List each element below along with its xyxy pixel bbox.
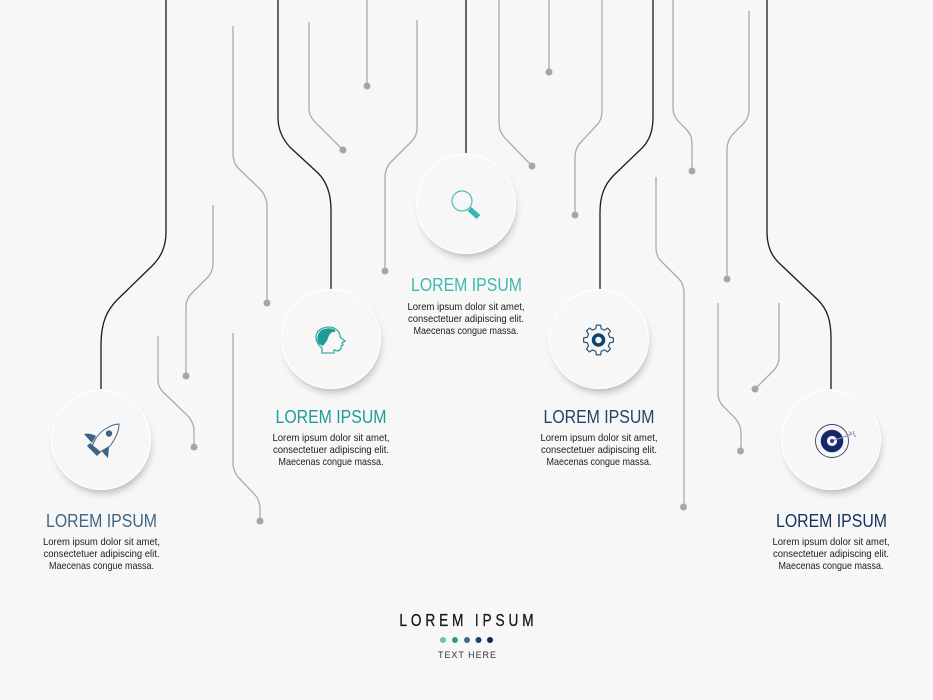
- text 4: consectetuer adipiscing elit.: [541, 444, 657, 456]
- heading 2: LOREM IPSUM: [276, 407, 386, 427]
- text 1: Maecenas congue massa.: [49, 560, 154, 572]
- icon: target: [816, 424, 856, 458]
- text 1: [43, 536, 160, 572]
- circuit lines: black: [101, 0, 831, 389]
- text 2: Lorem ipsum dolor sit amet,: [272, 432, 390, 444]
- text 3: [408, 301, 524, 337]
- footer title: LOREM IPSUM: [399, 612, 534, 630]
- text 5: [772, 536, 890, 572]
- text 4: Lorem ipsum dolor sit amet,: [540, 432, 658, 444]
- icon: gear: [584, 325, 613, 355]
- footer dots: [440, 637, 493, 643]
- circuit lines: grey: [158, 0, 779, 524]
- text 3: Maecenas congue massa.: [414, 325, 518, 337]
- text 1: consectetuer adipiscing elit.: [44, 548, 160, 560]
- panel: step 2 head: [272, 290, 390, 468]
- circle 1: [52, 390, 150, 493]
- icon: magnifier: [452, 191, 478, 217]
- panel: step 3 magnifier: [408, 154, 524, 337]
- footer subtitle: TEXT HERE: [438, 650, 496, 660]
- text 2: Maecenas congue massa.: [278, 456, 384, 468]
- panel: step 1 rocket: [43, 390, 160, 572]
- text 4: [540, 432, 658, 468]
- icon: rocket: [84, 424, 119, 458]
- text 3: consectetuer adipiscing elit.: [408, 313, 524, 325]
- circle 5: [782, 390, 880, 493]
- circle 2: [282, 290, 380, 392]
- circle 3: [416, 154, 516, 257]
- text 3: Lorem ipsum dolor sit amet,: [408, 301, 524, 313]
- circle 4: [550, 290, 648, 392]
- icon: head: [316, 327, 345, 353]
- text 2: [272, 432, 390, 468]
- text 1: Lorem ipsum dolor sit amet,: [43, 536, 160, 548]
- text 5: consectetuer adipiscing elit.: [773, 548, 889, 560]
- heading 3: LOREM IPSUM: [411, 275, 522, 295]
- text 2: consectetuer adipiscing elit.: [273, 444, 389, 456]
- heading 1: LOREM IPSUM: [46, 511, 157, 531]
- text 4: Maecenas congue massa.: [546, 456, 652, 468]
- text 5: Lorem ipsum dolor sit amet,: [772, 536, 890, 548]
- text 5: Maecenas congue massa.: [778, 560, 884, 572]
- panel: step 4 gear: [540, 290, 658, 468]
- panel: step 5 target: [772, 390, 890, 572]
- heading 5: LOREM IPSUM: [776, 511, 887, 531]
- heading 4: LOREM IPSUM: [544, 407, 654, 427]
